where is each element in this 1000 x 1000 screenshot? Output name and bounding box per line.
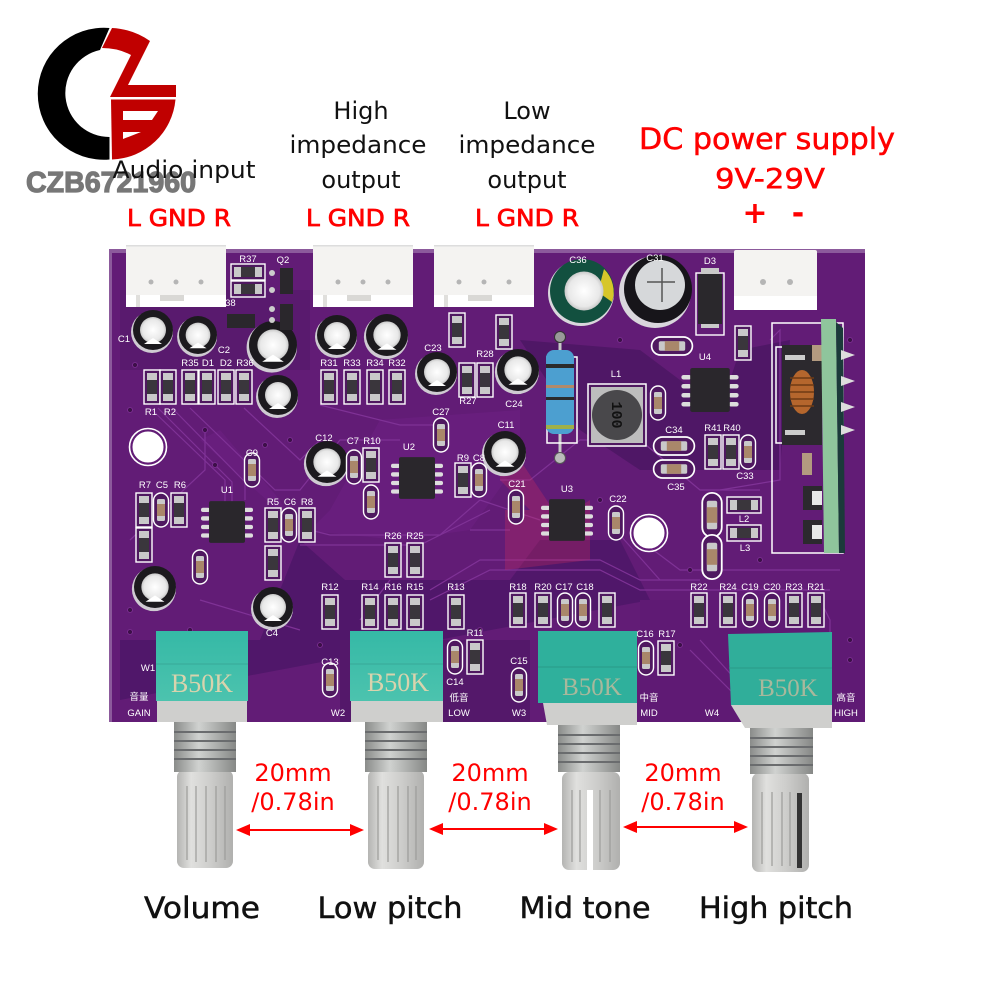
- silkscreen labels: R23: [785, 582, 803, 593]
- silkscreen labels: 低音: [449, 692, 469, 704]
- inductor L1: 100: [607, 401, 624, 429]
- silkscreen labels: C4: [266, 628, 278, 639]
- silkscreen labels: C13: [321, 657, 339, 668]
- silkscreen labels: L3: [740, 543, 750, 554]
- heading: DC power supply: DC power supply: [639, 122, 895, 156]
- silkscreen labels: C9: [246, 448, 258, 459]
- silkscreen labels: R38: [218, 298, 236, 309]
- silkscreen labels: C16: [636, 629, 654, 640]
- capacitor C36: [548, 259, 614, 326]
- silkscreen labels: R28: [476, 349, 494, 360]
- step-up module: [772, 319, 855, 553]
- polarity marks: -: [792, 196, 804, 231]
- silkscreen labels: HIGH: [834, 708, 858, 719]
- silkscreen labels: C21: [508, 479, 526, 490]
- potentiometer: high pitch: [728, 632, 832, 872]
- dimension: low pitch to mid tone: 20mm: [451, 759, 529, 787]
- label: volume: Volume: [144, 891, 260, 925]
- resistors: [136, 264, 824, 675]
- silkscreen labels: C27: [432, 407, 450, 418]
- silkscreen labels: C8: [473, 453, 485, 464]
- silkscreen labels: C22: [609, 494, 627, 505]
- silkscreen labels: R24: [719, 582, 737, 593]
- heading: DC power supply: [639, 122, 895, 195]
- silkscreen labels: C35: [667, 482, 685, 493]
- heading: high impedance output: output: [321, 166, 401, 194]
- inductor L1: [588, 384, 646, 446]
- heading: high impedance output: impedance: [290, 131, 426, 159]
- ceramic capacitors: [154, 337, 780, 702]
- pins: high impedance output: L GND R: [306, 206, 410, 232]
- potentiometer: mid tone: B50K: [562, 674, 622, 701]
- silkscreen labels: R11: [467, 628, 483, 639]
- silkscreen labels: R18: [509, 582, 527, 593]
- silkscreen labels: R15: [406, 582, 424, 593]
- silkscreen labels: R32: [388, 358, 406, 369]
- silkscreen labels: R27: [459, 396, 477, 407]
- silkscreen labels: C20: [763, 582, 781, 593]
- dimension: volume to low pitch: [236, 759, 364, 836]
- silkscreen labels: U1: [221, 485, 233, 496]
- silkscreen labels: C5: [156, 480, 168, 491]
- silkscreen labels: 中音: [639, 692, 659, 704]
- silkscreen labels: R14: [361, 582, 379, 593]
- heading: high impedance output: High: [333, 97, 389, 125]
- silkscreen labels: D1: [202, 358, 214, 369]
- watermark: faint red logo on board: [500, 430, 590, 570]
- silkscreen labels: L2: [739, 514, 749, 525]
- label: high pitch: High pitch: [699, 891, 853, 925]
- silkscreen labels: GAIN: [127, 708, 151, 719]
- diode D3: [696, 268, 724, 335]
- heading: audio input: Audio input: [112, 156, 256, 184]
- heading: low impedance output: Low: [503, 97, 551, 125]
- silkscreen labels: D2: [220, 358, 232, 369]
- silkscreen labels: R17: [658, 629, 676, 640]
- connector: high impedance output: [313, 245, 413, 307]
- silkscreen labels: R13: [447, 582, 465, 593]
- silkscreen labels: R20: [534, 582, 552, 593]
- logo: [38, 28, 176, 160]
- silkscreen labels: R5: [267, 497, 279, 508]
- silkscreen labels: R22: [690, 582, 708, 593]
- silkscreen labels: R2: [164, 407, 176, 418]
- silkscreen labels: R26: [384, 531, 402, 542]
- silkscreen labels: C36: [569, 255, 587, 266]
- heading: high impedance output: [290, 97, 426, 194]
- silkscreen labels: C15: [510, 656, 528, 667]
- silkscreen labels: R36: [236, 358, 254, 369]
- dimension: volume to low pitch: 20mm: [254, 759, 332, 787]
- silkscreen labels: R16: [384, 582, 402, 593]
- resistor R42: [546, 332, 577, 464]
- silkscreen labels: R35: [181, 358, 199, 369]
- connector: audio input: [126, 245, 226, 307]
- silkscreen labels: 高音: [836, 692, 856, 704]
- silkscreen labels: R40: [723, 423, 741, 434]
- silkscreen labels: C24: [505, 399, 523, 410]
- dimension: mid tone to high pitch: /0.78in: [641, 788, 725, 816]
- silkscreen labels: R8: [301, 497, 313, 508]
- polarity marks: [742, 196, 804, 231]
- silkscreen labels: U2: [403, 442, 415, 453]
- dimension: mid tone to high pitch: [623, 759, 748, 833]
- silkscreen labels: R21: [807, 582, 825, 593]
- heading: low impedance output: impedance: [458, 131, 596, 159]
- silkscreen labels: C12: [315, 433, 333, 444]
- dimension: low pitch to mid tone: [429, 759, 558, 835]
- silkscreen labels: W4: [705, 708, 719, 719]
- silkscreen labels: R12: [321, 582, 339, 593]
- silkscreen labels: C23: [424, 343, 442, 354]
- silkscreen labels: MID: [640, 708, 658, 719]
- connector: DC power: [734, 250, 817, 310]
- potentiometer: low pitch: B50K: [367, 668, 429, 697]
- silkscreen labels: LOW: [448, 708, 470, 719]
- transistors Q2 Q3: [227, 268, 293, 330]
- dimension: mid tone to high pitch: 20mm: [644, 759, 722, 787]
- silkscreen labels: C6: [284, 497, 296, 508]
- watermark text: CZB6721960: [26, 167, 196, 199]
- silkscreen labels: L1: [611, 369, 621, 380]
- potentiometer: volume: [156, 631, 248, 868]
- silkscreen labels: R7: [139, 480, 151, 491]
- dimension: low pitch to mid tone: /0.78in: [448, 788, 532, 816]
- silkscreen labels: Q2: [277, 255, 289, 266]
- polarity marks: +: [742, 196, 768, 231]
- silkscreen labels: C3: [167, 664, 179, 675]
- heading: low impedance output: output: [487, 166, 567, 194]
- silkscreen labels: C31: [646, 253, 664, 264]
- silkscreen labels: R33: [343, 358, 361, 369]
- dimension: volume to low pitch: /0.78in: [251, 788, 335, 816]
- silkscreen labels: C17: [555, 582, 573, 593]
- silkscreen labels: C1: [118, 334, 130, 345]
- silkscreen labels: R31: [320, 358, 338, 369]
- silkscreen labels: C19: [741, 582, 759, 593]
- silkscreen labels: R1: [145, 407, 157, 418]
- potentiometer: mid tone: [538, 631, 637, 870]
- silkscreen labels: C14: [446, 677, 464, 688]
- panel: circuit board: [109, 249, 865, 722]
- label: mid tone: Mid tone: [520, 891, 650, 925]
- capacitor C31: [619, 255, 692, 328]
- electrolytic capacitors: [131, 310, 539, 630]
- silkscreen labels: D3: [704, 256, 716, 267]
- silkscreen labels: 音量: [129, 691, 149, 703]
- silkscreen labels: U3: [561, 484, 573, 495]
- silkscreen labels: [118, 253, 858, 719]
- chips U1 U2 U3 U4: [201, 368, 739, 543]
- heading: DC power supply: 9V-29V: [715, 162, 825, 195]
- silkscreen labels: R41: [704, 423, 722, 434]
- silkscreen labels: C33: [736, 471, 754, 482]
- silkscreen labels: R37: [239, 254, 257, 265]
- silkscreen labels: R9: [457, 453, 469, 464]
- potentiometer: volume: B50K: [171, 669, 233, 698]
- silkscreen labels: W3: [512, 708, 526, 719]
- label: low pitch: Low pitch: [318, 891, 462, 925]
- heading: low impedance output: [458, 97, 596, 194]
- potentiometer: high pitch: B50K: [758, 675, 818, 702]
- silkscreen labels: W2: [331, 708, 345, 719]
- silkscreen labels: C11: [498, 420, 514, 431]
- mounting holes: [130, 428, 668, 552]
- silkscreen labels: R25: [406, 531, 424, 542]
- silkscreen labels: C34: [665, 425, 683, 436]
- silkscreen labels: C2: [218, 345, 230, 356]
- silkscreen labels: R34: [366, 358, 384, 369]
- silkscreen labels: U4: [699, 352, 711, 363]
- silkscreen labels: R10: [363, 436, 381, 447]
- pins: low impedance output: L GND R: [475, 206, 579, 232]
- silkscreen labels: C18: [576, 582, 594, 593]
- pins: audio input: L GND R: [127, 206, 231, 232]
- potentiometer: low pitch: [350, 631, 443, 869]
- connector: low impedance output: [434, 245, 534, 307]
- silkscreen labels: W1: [141, 663, 155, 674]
- silkscreen labels: R6: [174, 480, 186, 491]
- silkscreen labels: C7: [347, 436, 359, 447]
